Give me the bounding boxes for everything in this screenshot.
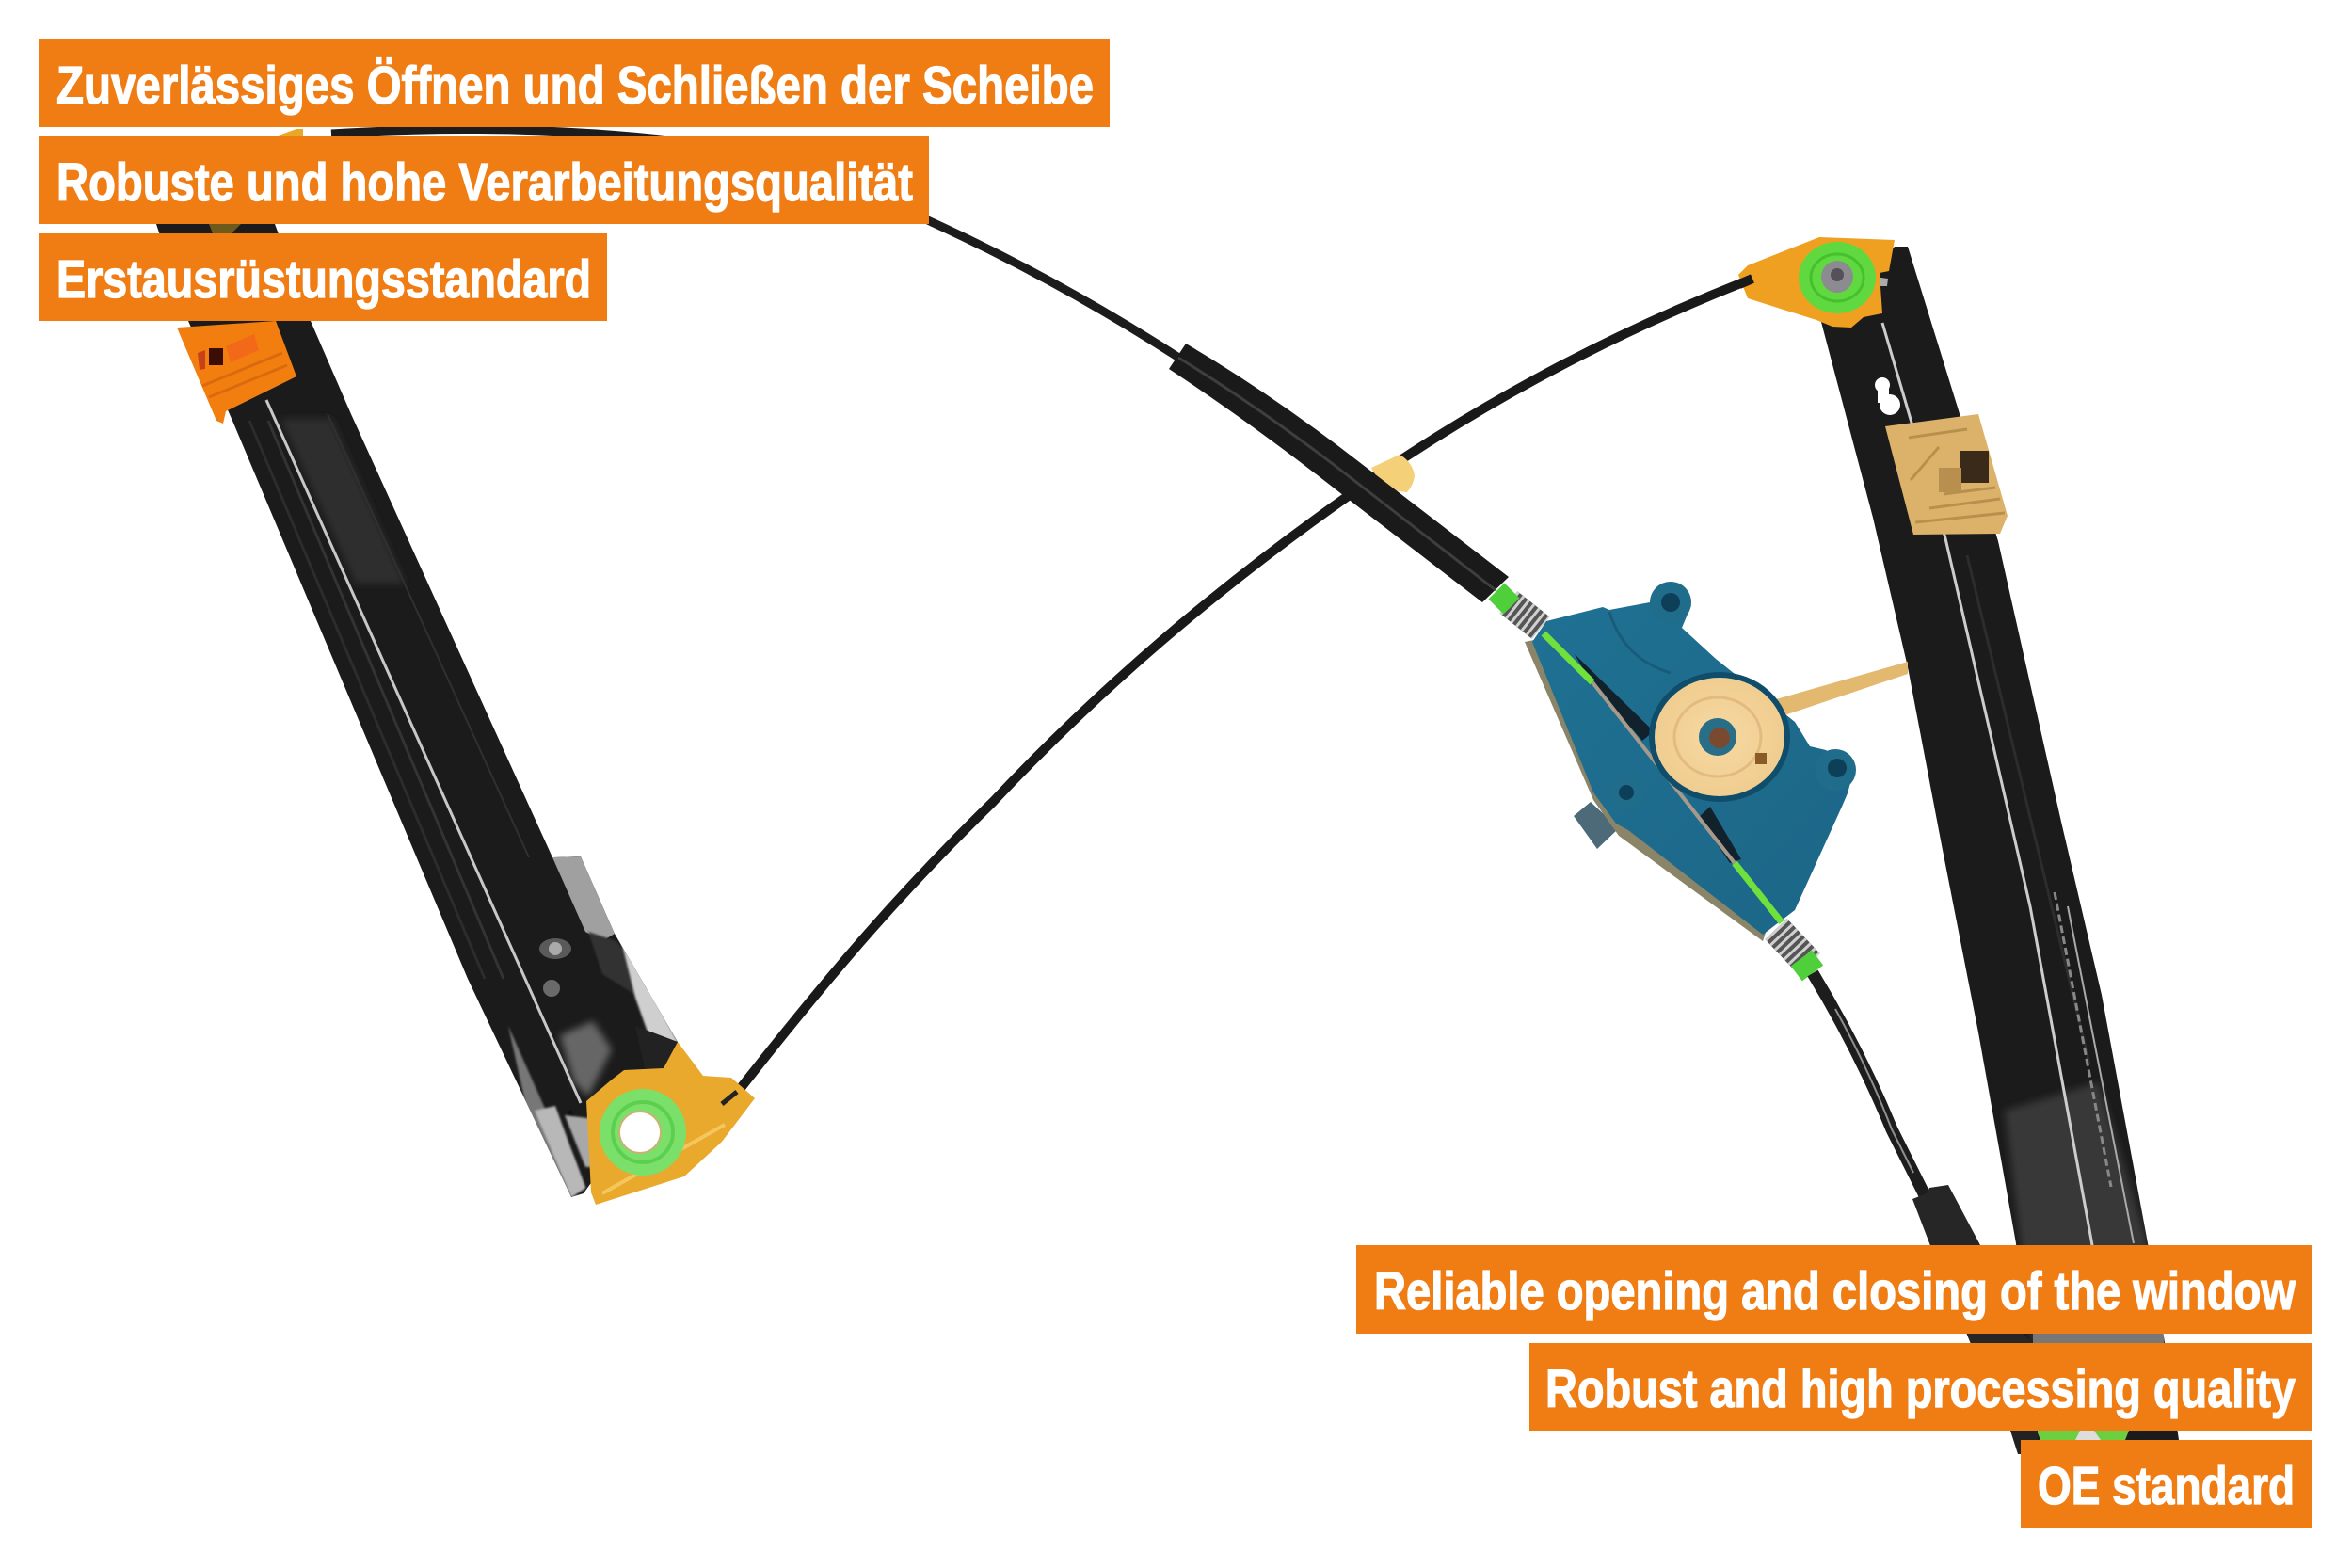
upper yellow fragment xyxy=(273,129,303,137)
tan drive strap xyxy=(1769,662,1908,717)
window regulator photo xyxy=(156,129,2179,1454)
cable sleeve xyxy=(1169,344,1509,602)
callout: OE standard DE xyxy=(39,233,607,321)
lower right sleeve xyxy=(1912,1185,2033,1344)
right bottom pulley xyxy=(2037,1431,2129,1440)
lower cable xyxy=(741,280,1748,1088)
blue motor housing xyxy=(1532,582,1856,935)
motor housing underside xyxy=(1525,640,1768,941)
left pulley xyxy=(586,1042,755,1205)
callout: reliable operation DE xyxy=(39,39,1110,127)
left guide rail xyxy=(156,224,678,1197)
cable junction tab xyxy=(1371,455,1415,492)
callout: processing quality DE: Robuste und hohe Verarbeitungsqualität xyxy=(56,152,913,213)
left mounting clip xyxy=(177,321,296,424)
callout: processing quality EN xyxy=(1529,1343,2312,1431)
right guide rail xyxy=(1821,247,2179,1440)
lower rail fragment xyxy=(2010,1431,2038,1454)
keyhole slot xyxy=(1875,377,1900,415)
callout: OE standard EN xyxy=(2021,1440,2312,1528)
callout: OE standard EN: OE standard xyxy=(2038,1456,2295,1516)
upper cable spring xyxy=(1496,591,1541,628)
lower cable spring xyxy=(1776,929,1813,973)
drive disc xyxy=(1649,672,1790,802)
right mounting clip xyxy=(1885,414,2008,535)
callout: reliable operation DE: Zuverlässiges Öffnen und Schließen der Scheibe xyxy=(56,56,1094,116)
English callouts xyxy=(1356,1245,2312,1528)
callout: processing quality DE xyxy=(39,136,929,224)
upper cable xyxy=(331,130,1191,365)
lower right cable xyxy=(1813,973,1939,1224)
callout: OE standard DE: Erstausrüstungsstandard xyxy=(56,249,591,310)
cable channel xyxy=(1544,633,1782,922)
German callouts xyxy=(39,39,1110,321)
callout: reliable operation EN xyxy=(1356,1245,2312,1334)
motor housing lug xyxy=(1574,802,1619,849)
right upper pulley xyxy=(1738,237,1895,328)
